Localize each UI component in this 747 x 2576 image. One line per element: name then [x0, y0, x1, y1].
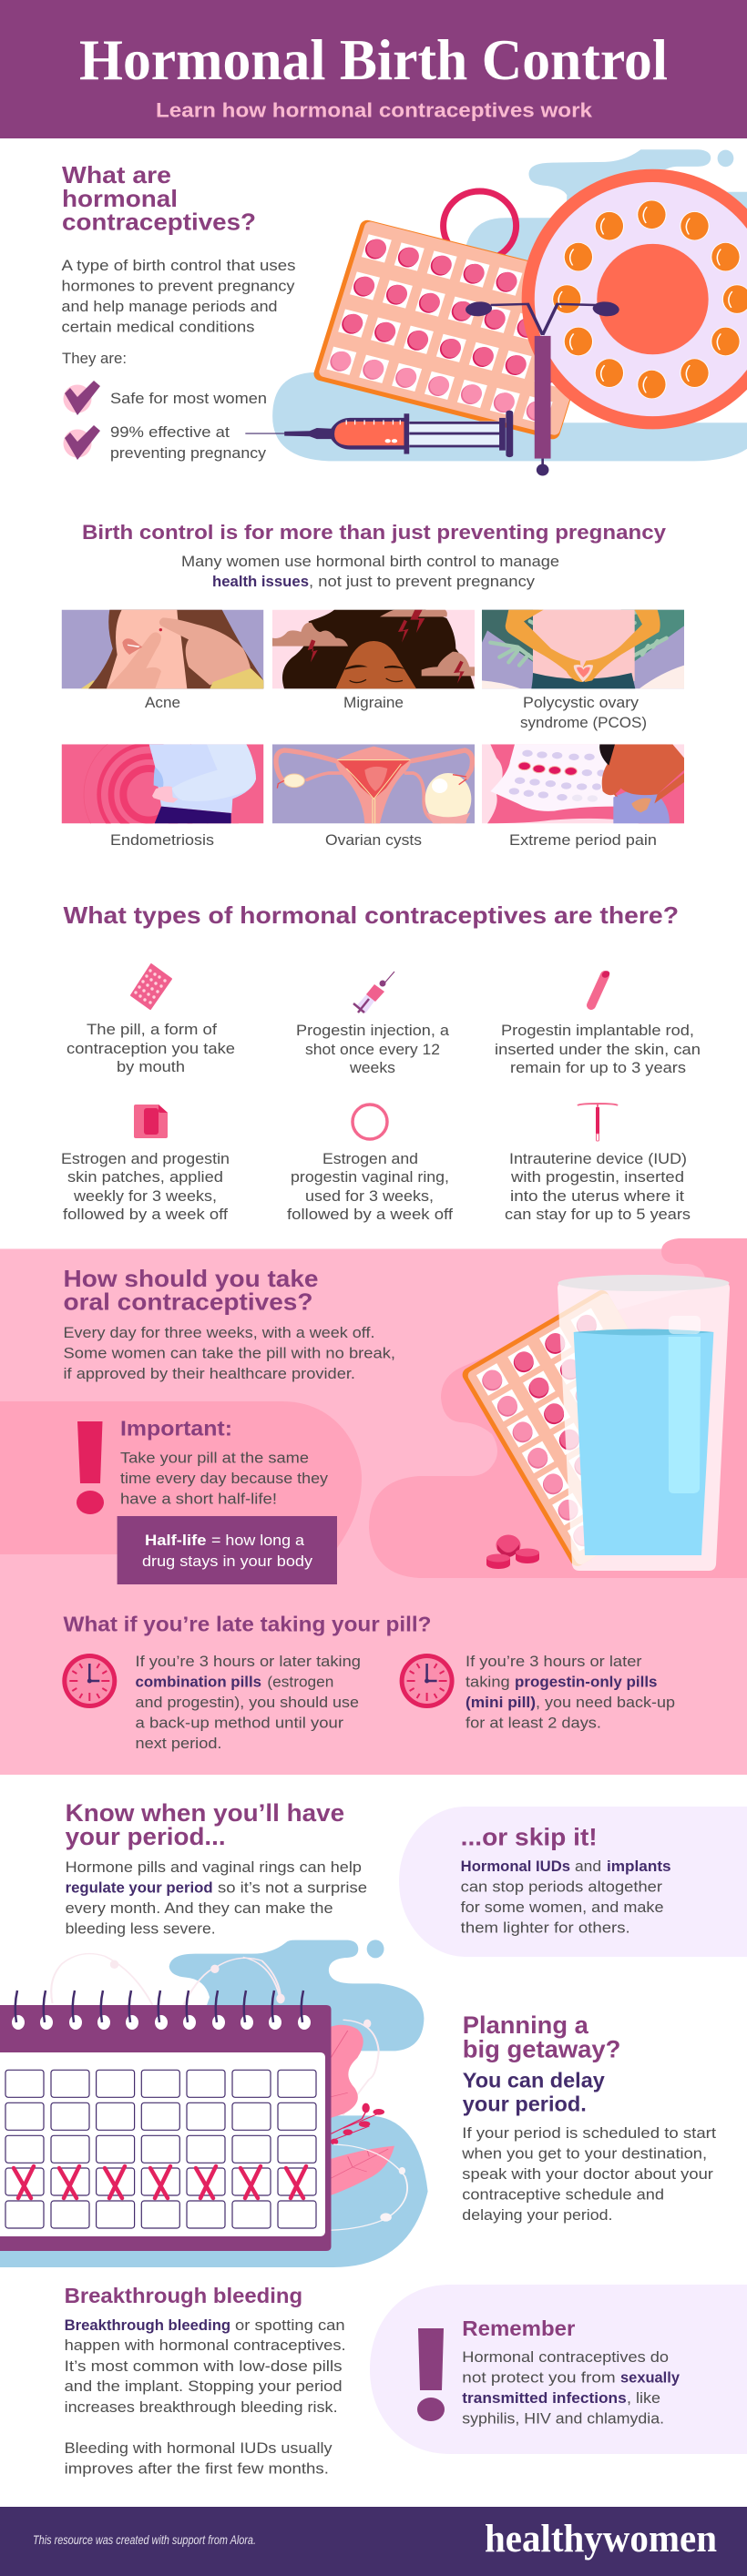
text: shot once every 12: [305, 1042, 440, 1058]
icon: ring: [353, 1105, 387, 1139]
intro text: [62, 258, 295, 367]
panel: migraine: [272, 610, 475, 688]
text: can stay for up to 5 years: [505, 1207, 691, 1223]
contraceptive illustration: [245, 149, 747, 475]
type: injection: [296, 972, 450, 1076]
late text: combination: (estrogen: [267, 1674, 333, 1690]
type: the pill: [67, 964, 235, 1075]
calendar: [0, 1991, 332, 2251]
darker background blob right: [369, 1238, 747, 1578]
credit line: This resource was created with support from Alora.: [33, 2533, 256, 2547]
panel: acne: [62, 610, 263, 688]
labels: Acne: [145, 695, 180, 711]
intro text: certain medical conditions: [62, 319, 255, 335]
labels: Extreme period pain: [509, 832, 657, 849]
text: used for 3 weeks,: [305, 1188, 434, 1205]
sub text: health issues: [212, 574, 309, 590]
panel: or skip it: Hormonal IUDs: [461, 1858, 570, 1875]
body text: Every day for three weeks, with a week off.: [64, 1325, 375, 1341]
intro text: and help manage periods and: [62, 299, 277, 315]
heading: oral contraceptives?: [64, 1288, 313, 1315]
half-life box: = how long a: [211, 1532, 305, 1549]
late text: combination: and progestin), you should use: [135, 1695, 359, 1711]
late text: progestin-only: [466, 1654, 675, 1732]
panel: or skip it: and: [575, 1858, 601, 1875]
breakthrough bleeding: Breakthrough bleeding: [65, 2284, 302, 2307]
half-life box: Half-life: [145, 1532, 206, 1549]
text: Progestin implantable rod,: [501, 1023, 694, 1039]
planning a getaway: your period.: [463, 2092, 587, 2115]
labels: syndrome (PCOS): [520, 715, 647, 731]
text: Progestin injection, a: [296, 1023, 450, 1039]
heading: How should you take: [64, 1265, 319, 1292]
planning a getaway: If your period is scheduled to start: [462, 2125, 716, 2142]
remember text: Hormonal contraceptives do: [462, 2349, 669, 2366]
header band: [0, 0, 747, 138]
late text: combination: If you’re 3 hours or later taking: [135, 1654, 361, 1670]
important callout: [120, 1417, 329, 1508]
calendar illustration: [0, 1940, 428, 2267]
heading: what are hormonal contraceptives: contraceptives?: [62, 208, 256, 235]
icon: clock 2: [400, 1654, 455, 1708]
icon: exclamation mark: [77, 1421, 104, 1514]
page: [0, 2052, 325, 2236]
planning a getaway: You can delay: [463, 2069, 605, 2092]
icon: syringe: [353, 972, 394, 1013]
period crosses: [14, 2166, 306, 2198]
intro text: They are:: [62, 351, 127, 367]
background blobs and leaves: [0, 1940, 428, 2267]
text: contraception you take: [67, 1041, 235, 1057]
pill pack: [312, 219, 608, 441]
remember text: [462, 2316, 680, 2428]
darker panel left: [0, 1401, 362, 1554]
labels: Ovarian cysts: [325, 832, 422, 849]
planning a getaway: speak with your doctor about your: [462, 2166, 713, 2183]
glass of water: [558, 1275, 730, 1571]
text: with progestin, inserted: [510, 1169, 684, 1186]
loose pills: [486, 1535, 539, 1569]
subtitle: Learn how hormonal contraceptives work: [156, 98, 593, 122]
item: effective: preventing pregnancy: [110, 445, 267, 462]
text: progestin vaginal ring,: [291, 1169, 449, 1186]
breakthrough bleeding: or spotting can: [235, 2317, 345, 2334]
panel: or skip it: them lighter for others.: [461, 1920, 630, 1937]
intro text: A type of birth control that uses: [62, 258, 295, 274]
text: Intrauterine device (IUD): [509, 1151, 687, 1167]
body text: if approved by their healthcare provider.: [64, 1366, 355, 1382]
panel: remember: [370, 2285, 747, 2454]
labels: Polycystic ovary: [523, 695, 640, 711]
syringe: [245, 411, 513, 457]
illustrations group 1: [62, 610, 475, 860]
text: regulate: so it’s not a surprise: [218, 1880, 367, 1897]
body text: [64, 1325, 395, 1382]
text: [287, 1151, 453, 1223]
text: inserted under the skin, can: [495, 1042, 701, 1058]
text: regulate: Hormone pills and vaginal rings can help: [66, 1859, 362, 1876]
sub text: Many women use hormonal birth control to manage: [181, 554, 559, 570]
panel: or skip it: for some women, and make: [461, 1899, 663, 1916]
late text: combination: [135, 1654, 361, 1752]
planning a getaway: when you get to your destination,: [461, 2146, 707, 2163]
text: regulate: bleeding less severe.: [66, 1921, 216, 1938]
vaginal ring: [444, 191, 517, 260]
panel: or skip it: [399, 1807, 747, 1957]
text: skin patches, applied: [67, 1169, 223, 1186]
heading: know your period: Know when you’ll have: [66, 1799, 344, 1827]
icon: check 1: [64, 381, 100, 415]
intro text: hormones to prevent pregnancy: [62, 279, 295, 295]
pill pack behind glass: [463, 1290, 629, 1566]
important callout: have a short half-life!: [120, 1492, 277, 1508]
text: regulate: [66, 1859, 367, 1938]
text: [67, 1022, 235, 1075]
icon: clock 1: [62, 1654, 117, 1708]
panel: oral contraceptives: [0, 1238, 747, 1775]
footer: [0, 2507, 747, 2576]
remember text: transmitted infections: [462, 2390, 627, 2407]
planning a getaway: contraceptive schedule and: [462, 2187, 664, 2204]
heading: more than preventing pregnancy: Birth control is for more than just preventing pregnancy: [82, 521, 667, 544]
heading: what are hormonal contraceptives: hormonal: [62, 185, 178, 212]
text: by mouth: [117, 1059, 185, 1075]
text: Estrogen and: [322, 1151, 418, 1167]
background blobs: [272, 149, 747, 461]
breakthrough bleeding: Breakthrough bleeding: [65, 2317, 230, 2334]
image panels: [62, 610, 684, 860]
breakthrough bleeding: Bleeding with hormonal IUDs usually: [65, 2440, 333, 2457]
logo wordmark: healthywomen: [485, 2518, 717, 2561]
late text: combination: combination pills: [135, 1674, 261, 1690]
heading: late: What if you’re late taking your pill?: [64, 1613, 432, 1636]
planning a getaway: delaying your period.: [462, 2207, 612, 2224]
panel: or skip it: ...or skip it!: [461, 1824, 598, 1851]
half-life box: [118, 1516, 337, 1584]
remember text: , like: [627, 2390, 660, 2407]
late text: progestin-only: taking: [466, 1674, 510, 1690]
type: vaginal ring: [287, 1105, 453, 1223]
item: safe: Safe for most women: [110, 391, 267, 407]
text: followed by a week off: [63, 1207, 228, 1223]
late text: progestin-only: for at least 2 days.: [466, 1716, 601, 1732]
labels: [110, 695, 657, 849]
remember text: sexually: [620, 2370, 680, 2387]
late text: progestin-only: , you need back-up: [536, 1695, 675, 1711]
panel: ovarian cysts: [272, 744, 475, 825]
type: patch: [61, 1105, 230, 1223]
check list: [64, 381, 267, 462]
planning a getaway: Planning a: [463, 2011, 589, 2039]
icon: T-shaped IUD: [578, 1104, 618, 1141]
text: into the uterus where it: [510, 1188, 684, 1205]
important callout: time every day because they: [120, 1471, 329, 1487]
text: remain for up to 3 years: [510, 1060, 686, 1076]
text: weekly for 3 weeks,: [73, 1188, 217, 1205]
planning a getaway: [461, 2011, 716, 2224]
icon: exclamation mark: [417, 2328, 445, 2421]
text: weeks: [349, 1060, 395, 1076]
remember text: syphilis, HIV and chlamydia.: [462, 2411, 664, 2428]
heading: types: What types of hormonal contraceptives are there?: [64, 901, 679, 929]
icon: skin patch: [134, 1105, 168, 1138]
title: Hormonal Birth Control: [79, 27, 668, 92]
text: regulate: every month. And they can make the: [66, 1900, 333, 1917]
labels: Migraine: [343, 695, 404, 711]
late text: progestin-only: (mini pill): [466, 1695, 536, 1711]
item: effective: 99% effective at: [110, 424, 230, 441]
illustrations group 2: [482, 610, 684, 823]
icon: check 2: [64, 425, 100, 460]
text: regulate: regulate your period: [66, 1880, 213, 1897]
late text: progestin-only: If you’re 3 hours or later: [466, 1654, 642, 1670]
breakthrough bleeding: improves after the first few months.: [65, 2461, 329, 2478]
heading: know your period: your period...: [66, 1823, 226, 1850]
labels: Endometriosis: [110, 832, 214, 849]
binder rings: [12, 1991, 311, 2030]
sub text: , not just to prevent pregnancy: [309, 574, 536, 590]
body text: Some women can take the pill with no break,: [64, 1346, 395, 1362]
remember text: not protect you from: [462, 2370, 616, 2387]
icon: pill pack: [131, 964, 171, 1009]
late text: combination: a back-up method until your: [135, 1716, 344, 1732]
sub text: [181, 554, 559, 590]
text: [495, 1023, 701, 1076]
heading: [64, 1265, 319, 1315]
late text: progestin-only: progestin-only pills: [515, 1674, 658, 1690]
heading: know your period: [66, 1799, 344, 1850]
icon: implant rod: [591, 970, 611, 1005]
breakthrough bleeding: happen with hormonal contraceptives.: [65, 2337, 346, 2354]
date grid: [5, 2070, 316, 2228]
half-life box: drug stays in your body: [142, 1553, 313, 1570]
panel: PCOS: [482, 610, 684, 688]
planning a getaway: big getaway?: [463, 2035, 620, 2062]
text: Estrogen and progestin: [61, 1151, 230, 1167]
breakthrough bleeding: [65, 2284, 346, 2478]
pill disk: [522, 169, 747, 429]
breakthrough bleeding: increases breakthrough bleeding risk.: [65, 2399, 338, 2416]
text: The pill, a form of: [87, 1022, 217, 1038]
text: [296, 1023, 450, 1076]
late text: combination: next period.: [135, 1736, 222, 1752]
panel: or skip it: implants: [607, 1858, 671, 1875]
IUD: [464, 300, 621, 475]
important callout: Take your pill at the same: [120, 1450, 309, 1466]
breakthrough bleeding: It’s most common with low-dose pills: [65, 2358, 343, 2375]
important callout: Important:: [120, 1417, 232, 1441]
heading: what are hormonal contraceptives: [62, 161, 256, 235]
text: [505, 1151, 691, 1223]
panel: extreme period pain: [482, 744, 684, 823]
type: implant: [495, 970, 701, 1076]
text: [61, 1151, 230, 1223]
panel: or skip it: can stop periods altogether: [461, 1879, 663, 1896]
text: followed by a week off: [287, 1207, 453, 1223]
remember text: Remember: [462, 2316, 575, 2340]
heading: what are hormonal contraceptives: What are: [62, 161, 171, 188]
breakthrough bleeding: and the implant. Stopping your period: [65, 2378, 343, 2395]
panel: endometriosis: [62, 744, 264, 823]
item: effective: [110, 424, 267, 462]
type: IUD: [505, 1104, 691, 1223]
